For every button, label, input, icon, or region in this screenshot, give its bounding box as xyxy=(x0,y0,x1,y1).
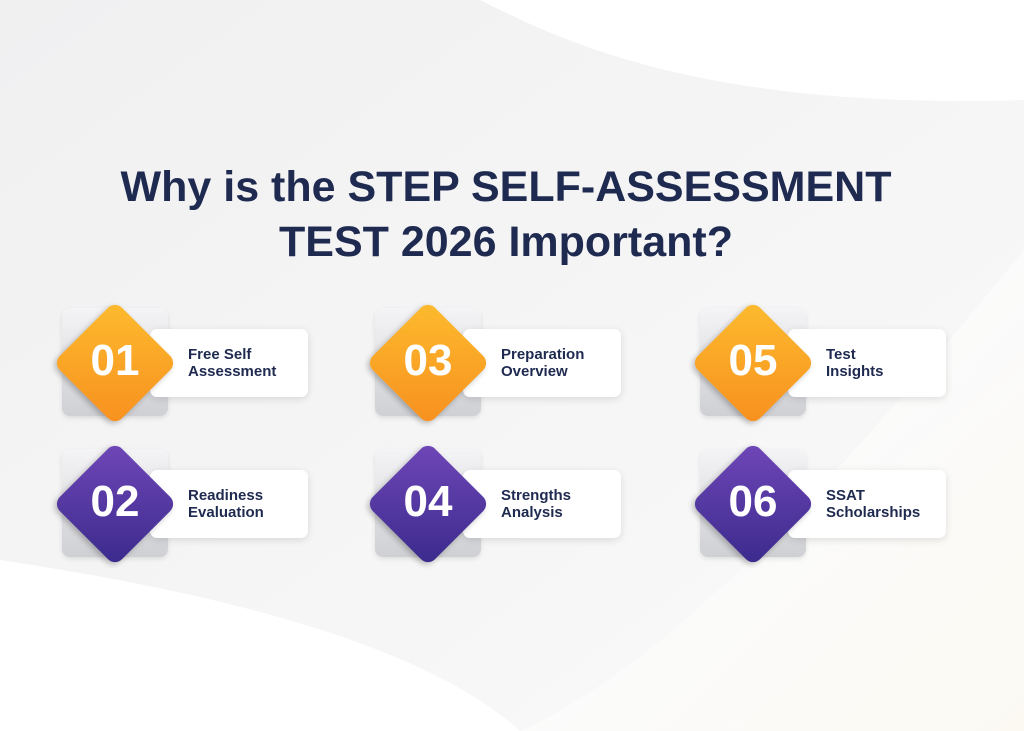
item 06: Scholarships xyxy=(826,504,920,521)
item 03 xyxy=(365,304,623,426)
title: TEST 2026 Important? xyxy=(279,218,733,266)
item 01 xyxy=(52,304,310,426)
item 05: Test xyxy=(826,346,856,363)
item 05: 05 xyxy=(729,336,777,385)
item 04: Strengths xyxy=(501,487,571,504)
item 04: Analysis xyxy=(501,504,563,521)
title xyxy=(120,163,892,266)
title: Why is the STEP SELF-ASSESSMENT xyxy=(121,163,891,211)
item 06 xyxy=(690,446,948,567)
item 05 xyxy=(690,304,948,426)
item 03: Overview xyxy=(501,363,568,380)
item 04 xyxy=(365,446,623,567)
item 06: SSAT xyxy=(826,487,865,504)
item 03: 03 xyxy=(404,336,452,385)
item 02: Readiness xyxy=(188,487,263,504)
item 02 xyxy=(52,446,310,567)
item 05: Insights xyxy=(826,363,884,380)
item 06: 06 xyxy=(729,477,777,526)
item 02: 02 xyxy=(91,477,139,526)
item 01: Assessment xyxy=(188,363,276,380)
item 03: Preparation xyxy=(501,346,584,363)
item 01: Free Self xyxy=(188,346,251,363)
item 02: Evaluation xyxy=(188,504,264,521)
item 04: 04 xyxy=(404,477,452,526)
item 01: 01 xyxy=(91,336,139,385)
